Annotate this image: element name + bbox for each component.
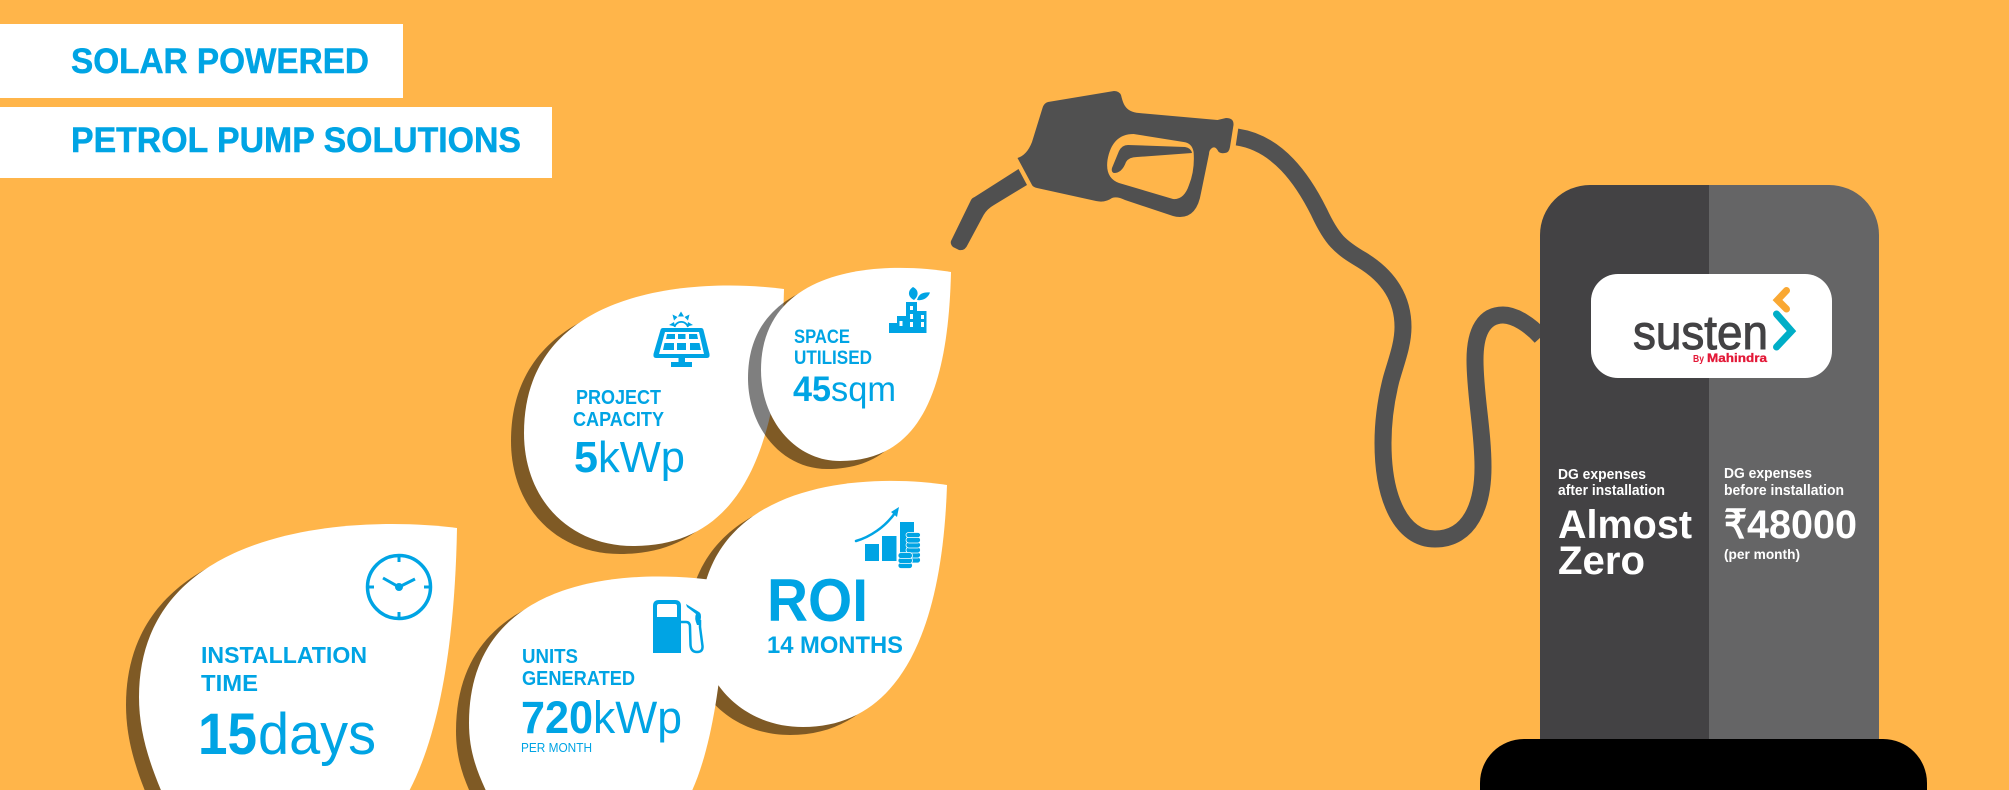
text: before installation: ₹	[1724, 503, 1747, 547]
value: 15days	[198, 702, 376, 767]
icon: solar panel	[653, 312, 710, 367]
icon: fuel pump	[653, 600, 703, 653]
label: project capacity: CAPACITY	[573, 409, 665, 431]
icon: growth chart	[856, 507, 920, 568]
value: 14 months: 14 MONTHS	[767, 632, 903, 659]
title line 1: SOLAR POWERED	[71, 42, 369, 81]
value: 5kWp: kWp	[598, 433, 685, 482]
value: 45sqm	[793, 370, 896, 409]
value: 720kWp	[521, 692, 682, 743]
text: after installation: after installation	[1558, 483, 1665, 499]
logo: susten by Mahindra: By	[1693, 354, 1704, 365]
logo: susten by Mahindra	[1591, 274, 1832, 378]
text: before installation: 48000	[1747, 503, 1857, 547]
title	[0, 24, 552, 178]
title line 2: PETROL PUMP SOLUTIONS	[71, 121, 521, 160]
icon: clock	[368, 556, 430, 618]
label: installation time: TIME	[201, 670, 258, 696]
icon: green city	[889, 287, 930, 333]
label: space utilised: SPACE	[794, 327, 850, 348]
label: space utilised: UTILISED	[794, 348, 872, 369]
pump base	[1480, 739, 1927, 790]
label: per month: PER MONTH	[521, 740, 592, 755]
panel: units generated	[456, 577, 726, 790]
nozzle body	[1018, 91, 1234, 217]
value: 720kWp: kWp	[593, 692, 682, 743]
text: after installation: Almost	[1558, 503, 1692, 547]
label: installation time	[201, 642, 367, 696]
logo: susten by Mahindra: Mahindra	[1707, 351, 1767, 365]
panel: installation time	[126, 524, 457, 790]
text: before installation: (per month)	[1724, 546, 1800, 562]
value: 5kWp: 5	[574, 433, 598, 482]
text: after installation: DG expenses	[1558, 467, 1646, 483]
value: 720kWp: 720	[521, 692, 593, 743]
label: units generated: GENERATED	[522, 668, 635, 690]
text: before installation: before installation	[1724, 483, 1844, 499]
label: ROI: ROI	[767, 567, 868, 634]
panel: project capacity	[511, 286, 784, 554]
label: project capacity	[573, 387, 665, 431]
icon: fuel nozzle	[951, 91, 1234, 250]
text: after installation	[1558, 467, 1692, 583]
value: 45sqm: 45	[793, 370, 831, 409]
label: installation time: INSTALLATION	[201, 642, 367, 668]
label: units generated	[522, 646, 635, 690]
spout	[951, 169, 1027, 250]
value: 15days: 15	[198, 702, 257, 767]
hose	[1237, 137, 1541, 539]
trigger	[1112, 145, 1192, 173]
left column	[1540, 185, 1709, 739]
label: space utilised	[794, 327, 872, 369]
label: units generated: UNITS	[522, 646, 578, 668]
logo: susten by Mahindra: susten	[1633, 307, 1768, 360]
panel: space utilised	[748, 268, 951, 469]
value: 15days: days	[258, 702, 376, 767]
text: after installation: Zero	[1558, 539, 1645, 583]
text: before installation	[1724, 466, 1857, 562]
label: project capacity: PROJECT	[576, 387, 661, 409]
title line 1	[0, 24, 403, 98]
text: before installation: DG expenses	[1724, 466, 1812, 482]
value: 45sqm: sqm	[831, 370, 896, 409]
panel: ROI	[687, 481, 947, 735]
title line 2	[0, 107, 552, 178]
right column	[1709, 185, 1879, 739]
pump body	[1480, 185, 1927, 790]
